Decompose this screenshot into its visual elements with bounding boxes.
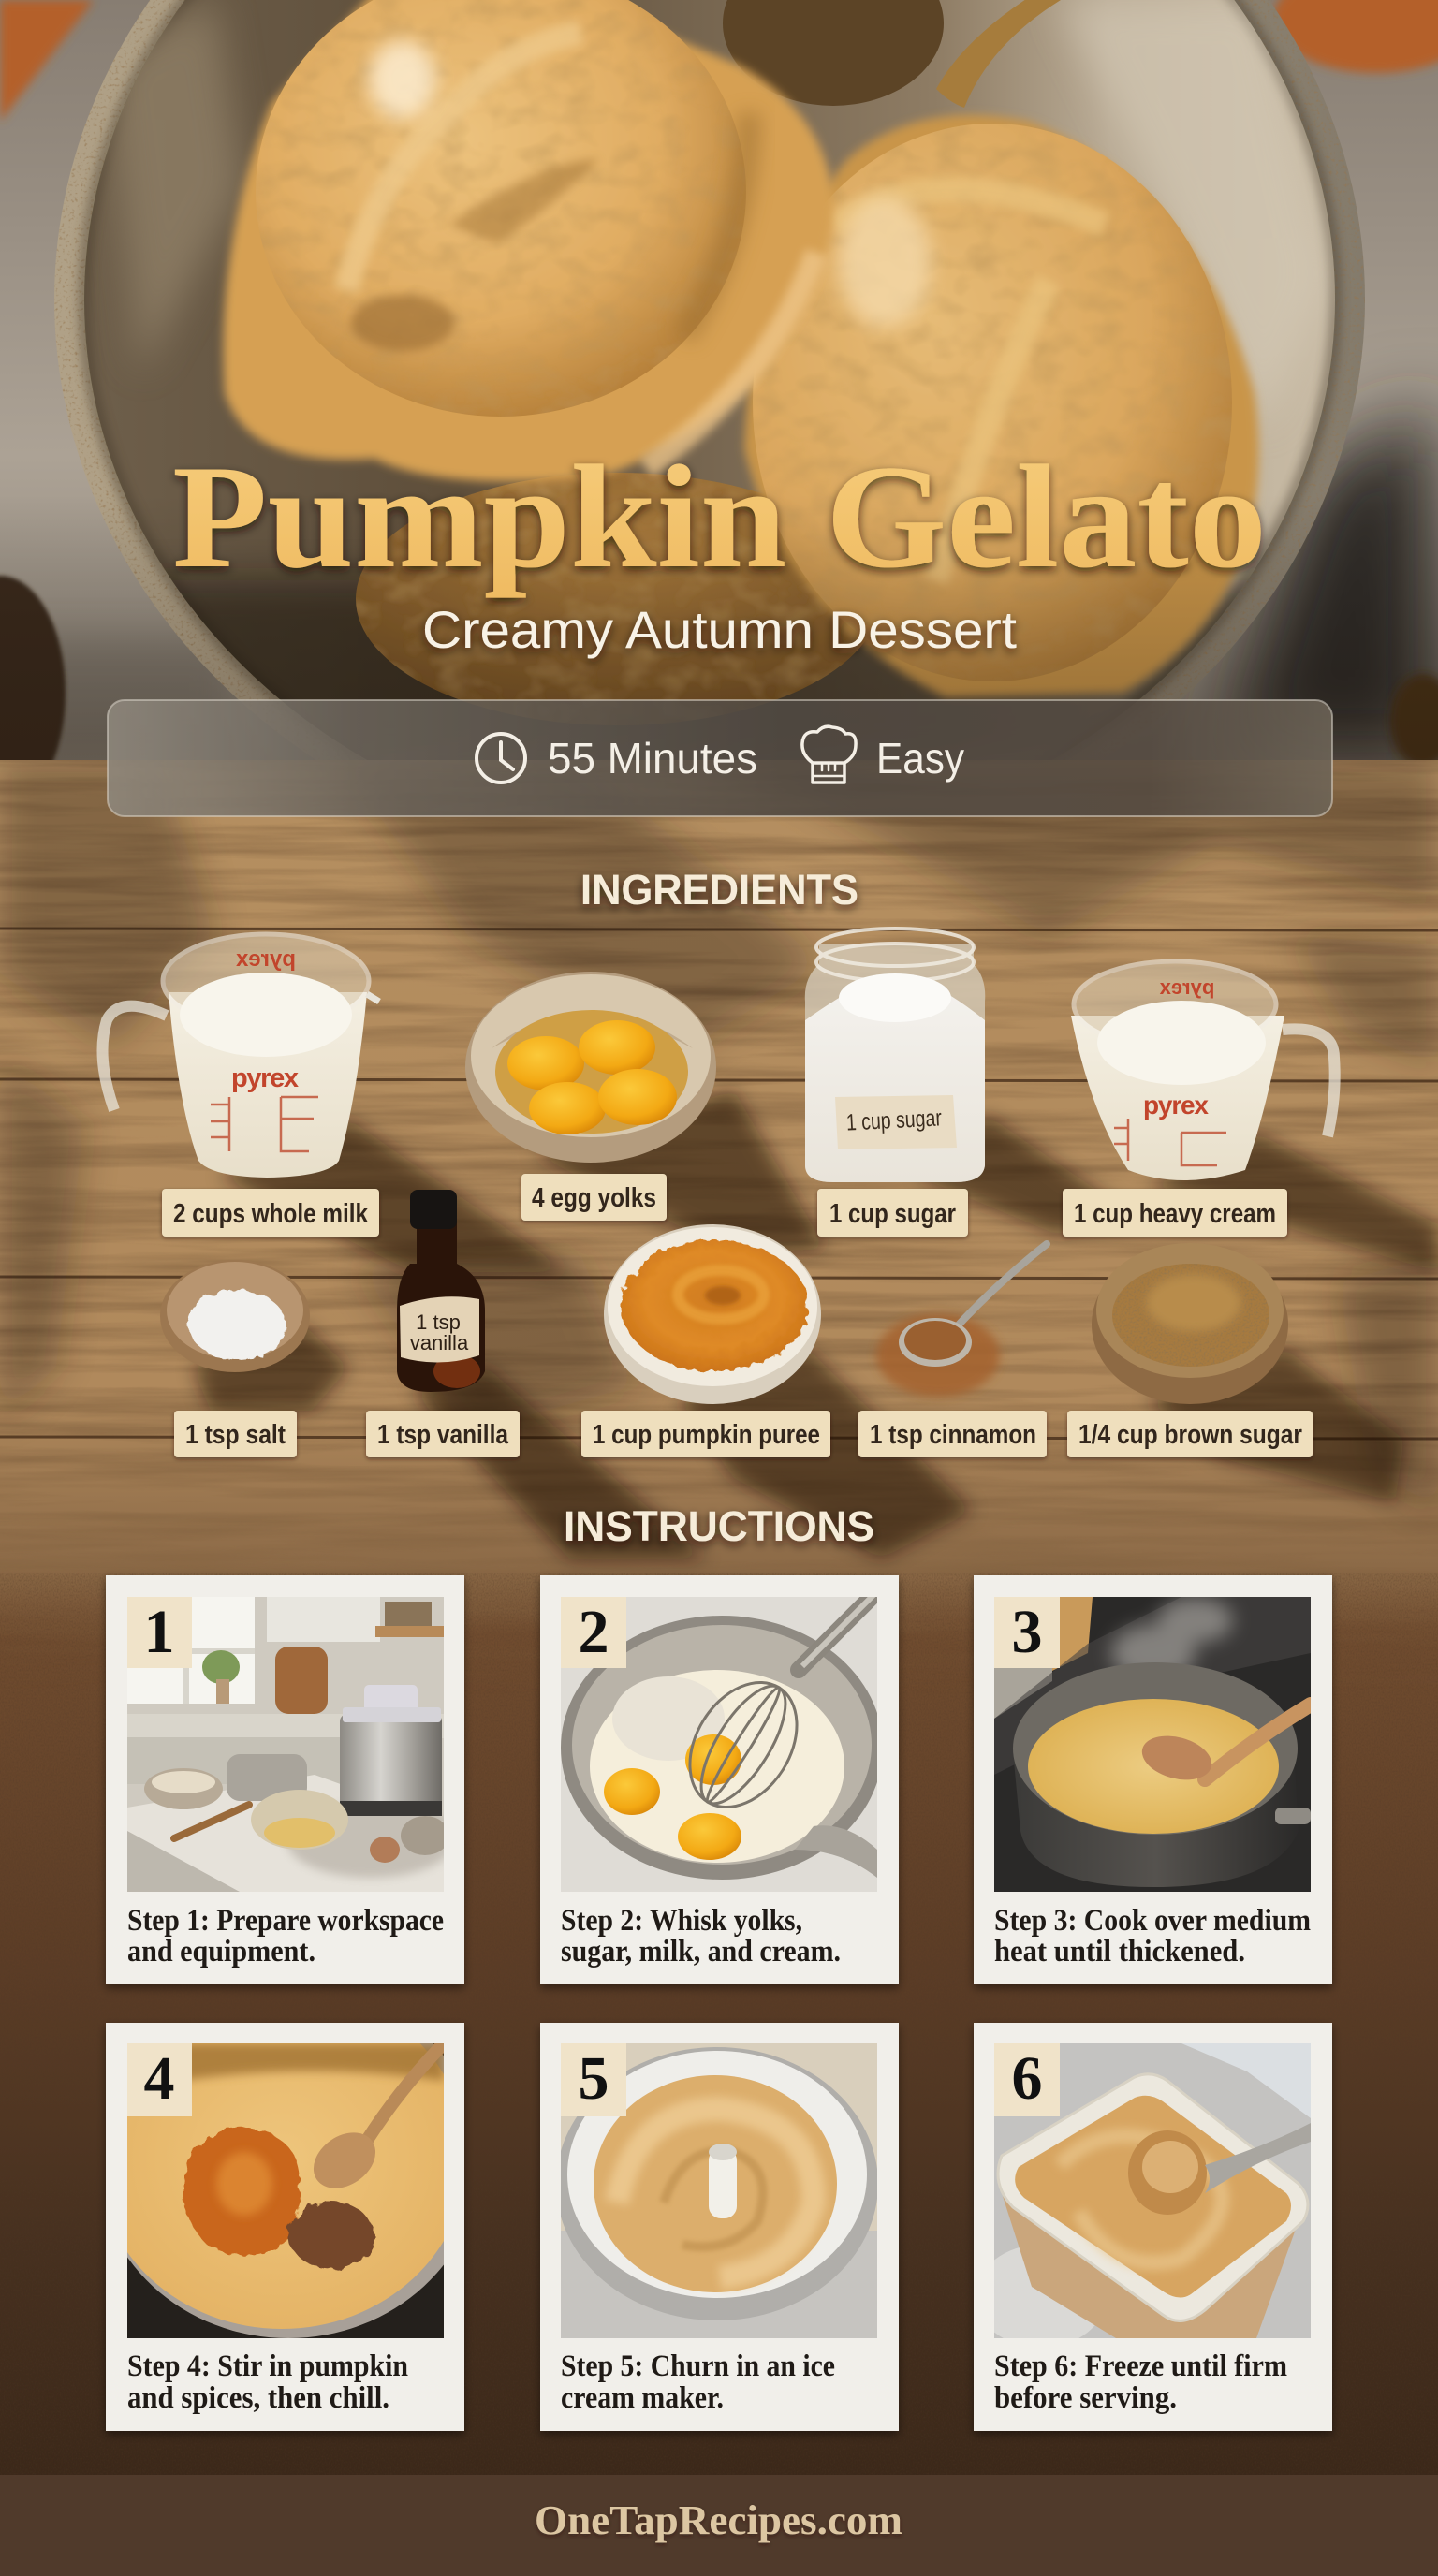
step card 4: and spices, then chill. xyxy=(127,2381,389,2415)
ingredient: salt bowl xyxy=(160,1260,310,1372)
icon: clock xyxy=(477,734,525,783)
bottle label: vanilla xyxy=(410,1331,469,1354)
label: 4 egg yolks: 4 egg yolks xyxy=(532,1183,656,1213)
ingredient: milk measuring cup: pyrex xyxy=(231,1063,299,1093)
label: 4 egg yolks xyxy=(521,1174,667,1221)
ingredient: cinnamon and spoon xyxy=(876,1244,1047,1397)
bottle label xyxy=(400,1296,479,1363)
hero photo: gelato scoops in ceramic bowl xyxy=(0,0,1438,760)
icon: chef hat xyxy=(802,726,856,783)
ingredient: egg yolks bowl xyxy=(465,972,716,1163)
number badge 5 xyxy=(561,2043,626,2116)
footer xyxy=(0,2475,1438,2576)
ingredient: cream measuring cup: pyrex xyxy=(1159,975,1214,999)
orange cloths xyxy=(0,0,94,122)
label: 1 cup heavy cream xyxy=(1063,1189,1287,1237)
label: 1 tsp vanilla: 1 tsp vanilla xyxy=(377,1420,509,1450)
step card 2: Step 2: Whisk yolks, xyxy=(561,1904,802,1938)
number badge 1: 1 xyxy=(144,1598,174,1666)
ingredient: vanilla bottle xyxy=(397,1190,485,1392)
step card 1: and equipment. xyxy=(127,1935,315,1969)
jar label: 1 cup sugar xyxy=(845,1105,943,1136)
photo: whisking yolks in pot xyxy=(561,1592,883,1892)
label: 2 cups whole milk: 2 cups whole milk xyxy=(173,1199,369,1229)
step card 3: Step 3: Cook over medium xyxy=(994,1904,1311,1938)
page background xyxy=(0,760,1438,2481)
step card 1 xyxy=(106,1575,464,1984)
spoon xyxy=(723,0,1077,108)
jar label xyxy=(835,1095,957,1149)
step card 5: Step 5: Churn in an ice xyxy=(561,2349,835,2383)
step card 3 xyxy=(974,1575,1332,1984)
ingredient: milk measuring cup: pyrex xyxy=(235,946,296,972)
subtitle: Creamy Autumn Dessert xyxy=(422,600,1017,659)
photo: prepared kitchen workspace xyxy=(127,1597,455,1892)
number badge 6 xyxy=(994,2043,1060,2116)
lower scoop xyxy=(356,473,865,700)
number badge 3 xyxy=(994,1597,1060,1668)
label: 1 tsp vanilla xyxy=(366,1411,520,1457)
step card 4: Step 4: Stir in pumpkin xyxy=(127,2349,408,2383)
heading: instructions: INSTRUCTIONS xyxy=(564,1502,874,1550)
label: 1 tsp salt: 1 tsp salt xyxy=(185,1420,286,1450)
sunlight shadows xyxy=(0,760,1438,1516)
step card 1: Step 1: Prepare workspace xyxy=(127,1904,444,1938)
right scoop melt xyxy=(744,115,1258,697)
number badge 6: 6 xyxy=(1011,2044,1043,2113)
right scoop xyxy=(753,124,1232,681)
footer website text: OneTapRecipes.com xyxy=(535,2497,902,2543)
label: 1 cup pumpkin puree xyxy=(581,1411,830,1457)
step card 6: Step 6: Freeze until firm xyxy=(994,2349,1287,2383)
photo: stirring pumpkin and spices xyxy=(96,1983,480,2338)
step card 2: sugar, milk, and cream. xyxy=(561,1935,841,1969)
label: 1/4 cup brown sugar xyxy=(1067,1411,1313,1457)
ingredient: milk measuring cup xyxy=(103,934,379,1178)
label: 1 tsp cinnamon: 1 tsp cinnamon xyxy=(870,1420,1036,1450)
number badge 3: 3 xyxy=(1011,1598,1043,1666)
number badge 2 xyxy=(561,1597,626,1668)
label: 1 tsp cinnamon xyxy=(858,1411,1047,1457)
ingredient: brown sugar bowl xyxy=(1092,1243,1288,1404)
ingredient: cream measuring cup xyxy=(1071,961,1335,1180)
step card 5: cream maker. xyxy=(561,2381,724,2415)
step card 2 xyxy=(540,1575,899,1984)
ingredient: cream measuring cup: pyrex xyxy=(1143,1090,1209,1120)
number badge 4: 4 xyxy=(144,2044,174,2113)
number badge 1 xyxy=(127,1597,192,1668)
ingredient: sugar jar xyxy=(805,929,985,1182)
step card 5 xyxy=(540,2023,899,2431)
bottle label: 1 tsp xyxy=(416,1310,461,1334)
label: 2 cups whole milk xyxy=(162,1189,379,1237)
bowl rim xyxy=(54,0,1365,700)
label: 1/4 cup brown sugar: 1/4 cup brown sugar xyxy=(1078,1420,1302,1450)
difficulty text: Easy xyxy=(876,734,964,783)
number badge 5: 5 xyxy=(579,2044,609,2113)
left scoop skirt xyxy=(224,0,833,481)
photo: freezing gelato in tub xyxy=(976,2043,1311,2348)
step card 6: before serving. xyxy=(994,2381,1177,2415)
heading: ingredients: INGREDIENTS xyxy=(580,866,858,914)
object shadows xyxy=(193,1090,1438,1559)
label: 1 tsp salt xyxy=(174,1411,297,1457)
left scoop xyxy=(256,0,746,417)
label: 1 cup sugar: 1 cup sugar xyxy=(829,1199,956,1229)
label: 1 cup heavy cream: 1 cup heavy cream xyxy=(1074,1199,1276,1229)
photo: cooking custard on stove xyxy=(994,1597,1311,1892)
step card 4 xyxy=(96,1983,480,2431)
title: Pumpkin Gelato xyxy=(172,435,1267,599)
plank seams xyxy=(0,929,1438,1439)
photo: churning in ice cream maker xyxy=(556,2043,878,2338)
dark wooden object left xyxy=(0,573,67,760)
info bar: time and difficulty xyxy=(108,700,1332,816)
number badge 4 xyxy=(127,2043,192,2116)
number badge 2: 2 xyxy=(579,1598,609,1666)
label: 1 cup pumpkin puree: 1 cup pumpkin puree xyxy=(593,1420,820,1450)
bowl inside xyxy=(84,0,1335,700)
step card 6 xyxy=(974,2023,1332,2431)
label: 1 cup sugar xyxy=(817,1189,968,1237)
step card 3: heat until thickened. xyxy=(994,1935,1245,1969)
time text: 55 Minutes xyxy=(548,734,757,783)
ingredient: pumpkin puree bowl xyxy=(604,1224,821,1404)
